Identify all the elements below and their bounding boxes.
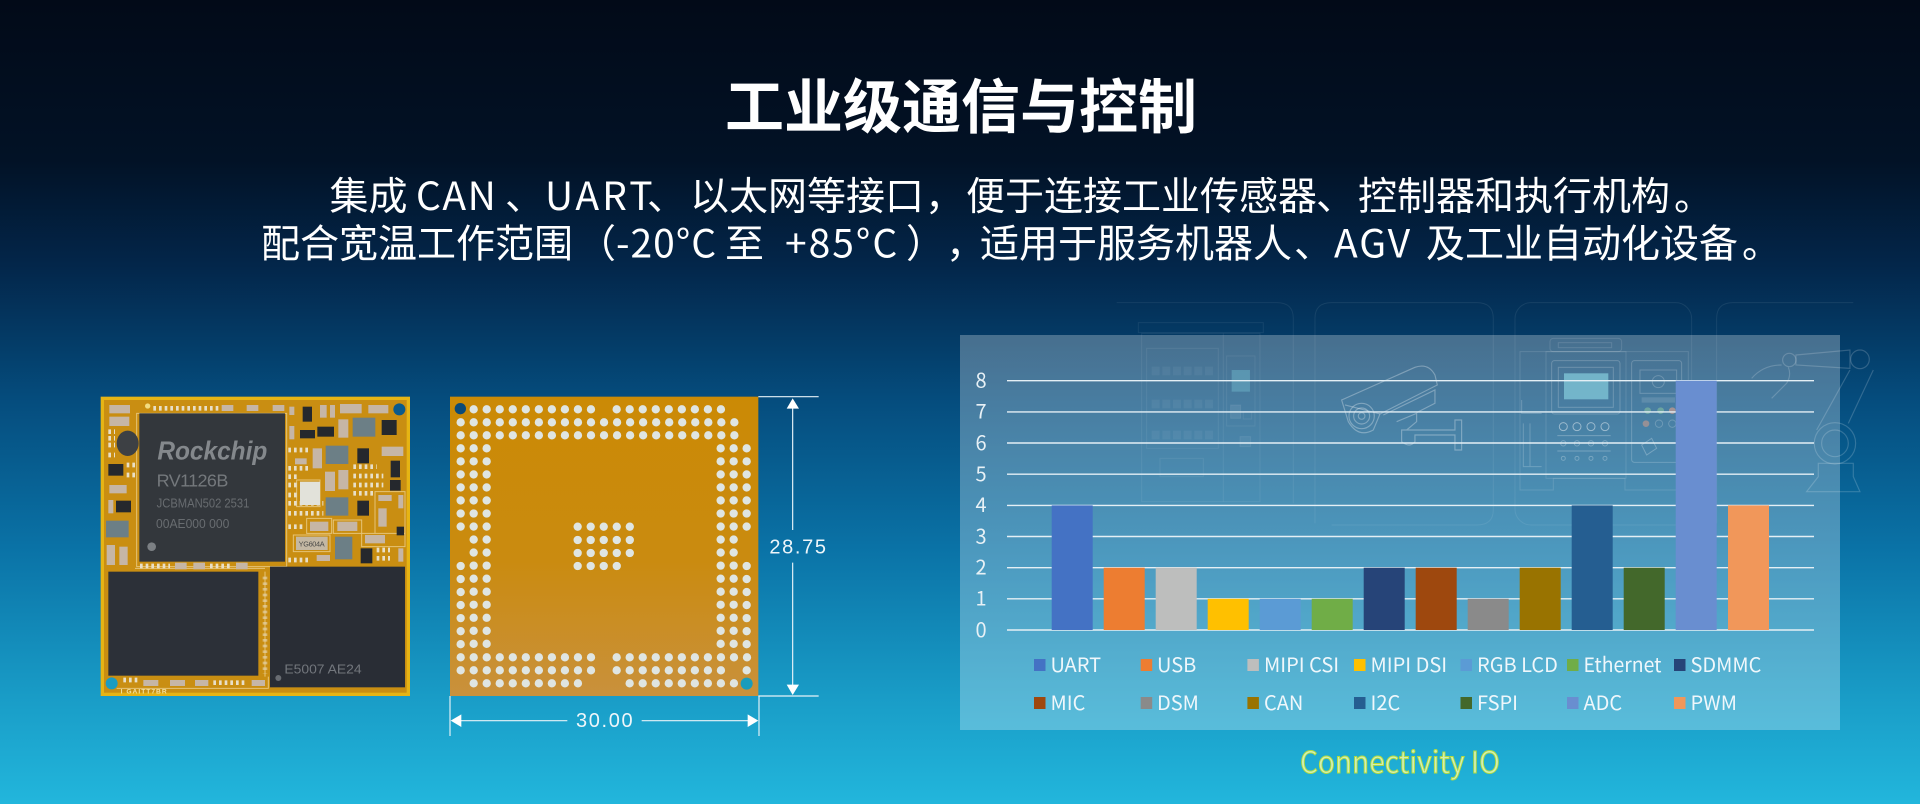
corner holes [455,403,466,414]
main SoC chip: JCBMAN502 2531 [157,495,249,510]
panel: chart backdrop [960,335,1840,730]
bar chart: connectivity IO counts [975,364,1814,716]
y axis labels: 5 [975,458,987,487]
icon: control panel card [1515,303,1692,525]
board [101,397,410,696]
y axis labels: 6 [975,427,987,456]
watermark: industrial equipment line art [1117,303,1873,525]
y axis labels: 8 [975,364,987,394]
bars [1052,381,1769,630]
legend: PWM [1690,687,1737,716]
legend: DSM [1157,687,1199,716]
legend: MIPI DSI [1370,649,1447,678]
subtitle line 2: 至 [725,214,764,270]
subtitle line 1: 以太网等接口 [690,166,924,222]
main SoC chip: Rockchip [157,435,267,465]
subtitle line 1: 控制器和执行机构 [1358,166,1670,222]
subtitle line 1: 、 [505,166,544,222]
lower-left memory chip [108,572,258,676]
y axis labels: 1 [975,583,987,612]
legend: CAN [1264,687,1303,716]
y axis labels: 3 [975,520,987,549]
subtitle line 2: ） [906,214,945,270]
inductors [106,418,375,559]
icon: cabinet card [1117,303,1293,503]
traces [117,413,405,688]
icon: security camera card [1315,303,1493,525]
grid lines [1007,381,1814,630]
board [450,397,758,696]
lower-right flash chip: E5007 AE24 [284,661,362,676]
legend: MIC [1050,687,1086,716]
legend [1034,649,1762,716]
main SoC chip: RV1126B [157,471,228,491]
dimension: height 28.75 [758,397,826,696]
module photo: top side [101,397,410,696]
subtitle line 2: +85°C [785,214,899,270]
subtitle line 2: AGV [1334,214,1412,270]
crystal oscillators [296,482,328,550]
small ICs [108,407,404,563]
legend: FSPI [1477,687,1518,716]
subtitle line 2: -20°C [616,214,717,270]
small pad rows [108,408,390,683]
crystal oscillators: YG604A [299,539,325,548]
main SoC chip [139,413,285,562]
passive components [107,404,403,686]
legend: USB [1157,649,1196,678]
subtitle line 2: 适用于服务机器人 [980,214,1292,270]
y axis labels: 0 [975,614,987,643]
legend: SDMMC [1690,649,1762,678]
subtitle line 1: CAN [416,166,497,222]
y axis labels: 2 [975,552,987,580]
subtitle line 1: ， [925,166,964,222]
y axis labels: 7 [975,396,987,425]
y axis labels: 4 [975,489,987,518]
module photo: bottom side with dimensions [450,397,826,736]
dimension: width 30.00: 30.00 [576,710,633,732]
legend: I2C [1370,687,1400,716]
mounting holes [393,403,405,415]
legend: Ethernet [1584,649,1662,678]
y axis labels [975,364,987,643]
subtitle line 2: 。 [1742,214,1781,270]
board marking: I GAITT7BR [121,688,167,695]
subtitle line 2: （ [577,214,616,270]
chart caption: Connectivity IO [1300,738,1500,782]
legend: MIPI CSI [1264,649,1339,678]
legend: UART [1050,649,1101,678]
icon: robot arm card [1717,303,1873,523]
subtitle line 2: 配合宽温工作范围 [261,214,573,270]
subtitle line 1: 便于连接工业传感器 [966,166,1317,222]
subtitle line 2: ， [946,214,985,270]
subtitle line 1: 、 [647,166,686,222]
solder pads [461,409,747,683]
subtitle line 1: 。 [1674,166,1713,222]
title: 工业级通信与控制 [725,60,1197,145]
subtitle line 1: 、 [1316,166,1355,222]
legend: ADC [1584,687,1622,716]
dimension: width 30.00 [450,696,759,736]
dimension: height 28.75: 28.75 [769,536,826,558]
main SoC chip: 00AE000 000 [156,516,229,531]
subtitle line 2: 、 [1294,214,1333,270]
lower-right flash chip [270,567,405,687]
subtitle line 1: 集成 [330,166,408,222]
subtitle line 1: UART [545,166,656,222]
subtitle line 2: 及工业自动化设备 [1426,214,1738,270]
legend: RGB LCD [1477,649,1558,678]
